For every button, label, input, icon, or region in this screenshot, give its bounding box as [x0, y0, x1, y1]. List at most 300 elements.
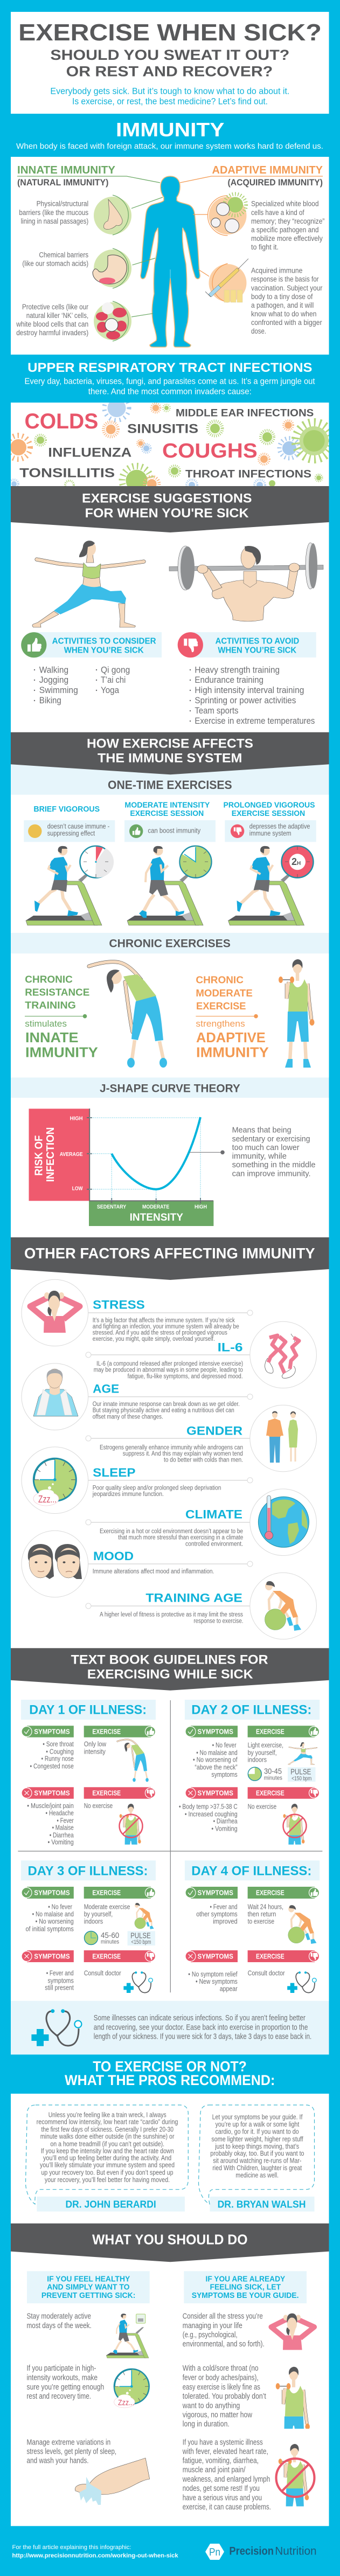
day 1 bad symptoms: • Vomiting — [47, 1838, 74, 1846]
list: activities to consider: Biking — [39, 695, 61, 705]
factor: training age: response to exercise. — [193, 1618, 243, 1625]
footer: Precision Nutrition logo: Nutrition — [275, 2545, 317, 2558]
text: chronic moderate exercise: MODERATE — [196, 988, 253, 999]
day 3 of illness: DAY 3 OF ILLNESS: — [28, 1864, 148, 1878]
text: vaccination: vaccination. Subject your — [251, 284, 323, 292]
factor: age: Our innate immune response can break down as we get older. — [93, 1401, 240, 1408]
list: activities to avoid: Exercise in extreme temperatures — [195, 716, 315, 726]
tip: rest and recovery: If you participate in high- — [27, 2364, 96, 2373]
factor: stress: STRESS — [93, 1298, 145, 1311]
tip: systemic illness: weakness, and enlarged lymph — [182, 2475, 270, 2484]
text: chronic moderate exercise: EXERCISE — [196, 1001, 246, 1012]
column: prolonged vigorous: depresses the adaptive — [249, 823, 310, 830]
section banner: EXERCISE SUGGESTIONS — [82, 491, 252, 506]
day 1 bad exercise — [84, 1787, 155, 1845]
factor: climate: Exercising in a hot or cold environment doesn’t appear to be — [100, 1528, 243, 1535]
day 3 bad exercise: EXERCISE — [92, 1952, 121, 1960]
day 1 good symptoms: • Runny nose — [41, 1755, 74, 1763]
box: if you are already sick: SYMPTOMS BE YOUR GUIDE. — [192, 2291, 299, 2300]
factor: sleep — [22, 1447, 253, 1513]
day 1 good symptoms: • Congested nose — [30, 1762, 74, 1770]
connector lines — [131, 197, 209, 317]
panel: title — [11, 12, 329, 114]
day 3 good exercise: indoors — [84, 1917, 103, 1926]
adaptive heading: ADAPTIVE IMMUNITY — [212, 164, 323, 176]
day 2 bad exercise — [248, 1787, 319, 1845]
day 2 good exercise: minutes — [264, 1775, 282, 1781]
text: chemical barriers: (like our stomach acids) — [22, 259, 88, 267]
text: vaccination: confronted with a bigger — [251, 318, 322, 327]
day 3 bad exercise — [84, 1950, 155, 1993]
day 1 good exercise: Only low — [84, 1740, 107, 1748]
text: vaccination — [251, 267, 323, 335]
callout: activities to avoid — [178, 632, 316, 657]
day 2 bad exercise: EXERCISE — [256, 1789, 285, 1797]
column: moderate intensity: EXERCISE SESSION — [130, 809, 204, 818]
day 1 good symptoms: • Coughing — [46, 1747, 74, 1755]
tip: cold or sore throat: With a cold/sore throat (no — [183, 2364, 259, 2373]
day 1 bad symptoms: • Headache — [45, 1809, 74, 1817]
day 4 bad symptoms: • New symptoms — [196, 1977, 238, 1985]
day 2 good symptoms: SYMPTOMS — [197, 1728, 233, 1735]
x axis labels: HIGH — [195, 1204, 207, 1210]
icon: blood cells — [94, 301, 131, 341]
innate heading — [17, 164, 160, 188]
footer: Precision Nutrition logo: Pn — [209, 2547, 220, 2558]
day 3 bad symptoms: still present — [45, 1984, 74, 1992]
day 4 bad symptoms: • No symptom relief — [188, 1970, 238, 1978]
list: activities to avoid: Team sports — [195, 705, 238, 716]
quote: John Berardi: you’ll end up feeling better during the activity. And — [43, 2154, 171, 2162]
factor: training age — [86, 1573, 316, 1639]
section banner: WHAT YOU SHOULD DO — [92, 2231, 248, 2247]
factor: training age: A higher level of fitness is protective as it may limit the stress — [100, 1611, 243, 1618]
virus decoration — [11, 403, 329, 486]
section banner: THE IMMUNE SYSTEM — [98, 751, 242, 765]
day 2 good symptoms: “above the neck” — [195, 1763, 238, 1771]
day 2 good exercise: EXERCISE — [256, 1728, 285, 1735]
factor: IL-6 — [86, 1321, 316, 1388]
list: activities to consider: T’ai chi — [101, 675, 126, 685]
y axis labels — [33, 1116, 83, 1192]
x axis labels: MODERATE — [142, 1204, 170, 1210]
x axis labels: INTENSITY — [130, 1212, 183, 1223]
day 2 good symptoms: • No worsening of — [193, 1756, 238, 1764]
illustration: washing hands — [75, 2458, 150, 2505]
callout: curve explanation: can improve immunity. — [232, 1169, 311, 1178]
day 4 good symptoms: other symptoms — [196, 1910, 238, 1918]
text: chronic moderate exercise: IMMUNITY — [196, 1044, 269, 1061]
text: physical barriers: lining in nasal passages) — [21, 217, 88, 225]
quote: Bryan Walsh: ried With Children, laughter is great — [212, 2164, 302, 2172]
day 3 good symptoms: • No malaise and — [32, 1910, 74, 1918]
day 3 good exercise: by yourself, — [84, 1910, 113, 1918]
tip: cold or sore throat: long in duration. — [183, 2419, 230, 2428]
callout: activities to avoid: ACTIVITIES TO AVOID — [216, 637, 299, 646]
tip: rest and recovery: rest and recovery time. — [27, 2392, 91, 2401]
quote: John Berardi: your recovery, you’ll feel better for having moved. — [45, 2176, 170, 2184]
day 1 good symptoms: SYMPTOMS — [34, 1728, 70, 1735]
column: prolonged vigorous: PROLONGED VIGOROUS — [223, 801, 315, 809]
callout: activities to consider: ACTIVITIES TO CONSIDER — [52, 637, 156, 646]
heading: to exercise or not — [65, 2058, 275, 2088]
tip: systemic illness: fatigue, vomiting, diarrhea, — [183, 2456, 259, 2465]
text: specialized white blood cells — [251, 200, 324, 251]
quote: John Berardi: you’ll likely stimulate your immune system and speed — [40, 2161, 175, 2169]
footer: article link — [12, 2544, 179, 2559]
day 4 good exercise: to exercise — [248, 1917, 274, 1926]
day 1 good exercise: intensity — [84, 1747, 106, 1755]
day 4 bad exercise: EXERCISE — [256, 1952, 285, 1960]
tip: systemic illness: muscle and joint pain/ — [183, 2466, 246, 2475]
column: prolonged vigorous: immune system — [249, 830, 291, 837]
column: prolonged vigorous: EXERCISE SESSION — [232, 809, 305, 818]
main title: SHOULD YOU SWEAT IT OUT? — [50, 47, 289, 63]
text: chronic resistance training: INNATE — [25, 1029, 79, 1045]
box: if you are already sick: FEELING SICK, LET — [210, 2283, 281, 2292]
tip: systemic illness: with fever, elevated heart rate, — [182, 2447, 268, 2456]
day 1 bad symptoms: SYMPTOMS — [34, 1789, 70, 1797]
day 2 bad symptoms — [179, 1787, 238, 1832]
factor: stress — [22, 1279, 253, 1346]
day 2 good symptoms — [185, 1726, 238, 1778]
day 3 good exercise: <150 bpm — [131, 1939, 151, 1945]
illustration: man lifting barbell — [169, 543, 323, 621]
tip: manage stress: stress levels, get plenty of sleep, — [27, 2447, 116, 2456]
list: activities to avoid: Sprinting or power activities — [195, 695, 296, 705]
infection names: SINUSITIS — [127, 421, 198, 436]
day 3 good symptoms: • No worsening — [36, 1917, 74, 1926]
quote: Bryan Walsh: sit around watching re-runs of Mar- — [213, 2156, 301, 2164]
footer: Precision Nutrition logo — [205, 2544, 317, 2560]
icon: nose — [94, 195, 131, 235]
factor: climate — [86, 1489, 316, 1555]
day 2 good exercise: <150 bpm — [292, 1775, 311, 1782]
day 2 bad symptoms: • Diarrhea — [213, 1817, 238, 1825]
main title: EXERCISE WHEN SICK? — [18, 19, 322, 46]
box: if you feel healthy — [27, 2271, 150, 2303]
day 1 bad symptoms: • Malaise — [52, 1824, 74, 1832]
tip: consider stress: Consider all the stress you’re — [183, 2312, 263, 2321]
text: vaccination: Acquired immune — [251, 267, 302, 275]
section banner — [11, 1237, 329, 1280]
factor: stress: exercise, you might, quite simply, overload yourself. — [93, 1336, 215, 1342]
day 2 bad symptoms: SYMPTOMS — [197, 1789, 233, 1797]
main title: OR REST AND RECOVER? — [66, 63, 273, 79]
list: activities to avoid: High intensity interval training — [195, 685, 304, 695]
column: brief vigorous — [24, 805, 115, 925]
day 2 good exercise: indoors — [248, 1756, 267, 1764]
icon: syringe and vials — [205, 259, 248, 302]
quote: Bryan Walsh: some lighter weight, higher rep stuff — [211, 2135, 303, 2143]
factor: gender — [86, 1405, 316, 1472]
day 2 good symptoms: • No malaise and — [196, 1748, 238, 1756]
day 3 good symptoms: SYMPTOMS — [34, 1889, 70, 1896]
day 1 good exercise — [84, 1726, 155, 1782]
column: moderate intensity: can boost immunity — [148, 827, 201, 835]
tip: stay moderately active — [27, 2312, 149, 2358]
tip: cold or sore throat: tolerated. You probably don’t — [183, 2392, 266, 2401]
callout: activities to consider — [21, 632, 162, 657]
day 4 bad exercise — [248, 1950, 319, 1993]
factor: IL-6: IL-6 (a compound released after prolonged intensive exercise) — [96, 1361, 243, 1367]
text: specialized white blood cells: to fight it. — [251, 243, 279, 251]
column: prolonged vigorous: 2H — [292, 856, 301, 867]
factor: age: AGE — [93, 1382, 119, 1395]
y axis labels: INFECTION — [45, 1127, 57, 1182]
day 4 good exercise: then return — [248, 1910, 276, 1918]
day 1 bad symptoms — [22, 1787, 74, 1846]
body figure — [141, 176, 200, 347]
callout: curve explanation: Means that being — [232, 1126, 292, 1135]
infection names: INFLUENZA — [48, 446, 131, 460]
text: chronic resistance training: stimulates — [25, 1019, 67, 1029]
day 2 good exercise: PULSE — [290, 1768, 311, 1777]
tip: systemic illness: nodes, get some rest! If you — [183, 2484, 260, 2493]
day 3 of illness — [21, 1860, 156, 1993]
factor: mood: Immune alterations affect mood and inflammation. — [93, 1568, 214, 1575]
box: if you feel healthy: PREVENT GETTING SICK: — [41, 2291, 136, 2300]
quote: Bryan Walsh: you’re up for a walk or some light — [216, 2120, 300, 2128]
day 2 bad exercise: No exercise — [248, 1803, 276, 1811]
day 2 bad symptoms: • Increased coughing — [185, 1810, 238, 1818]
day 4 good exercise — [248, 1887, 319, 1944]
factor: stress: It’s a big factor that affects the immune system. If you’re sick — [93, 1317, 235, 1324]
day 3 bad symptoms: symptoms — [47, 1976, 74, 1984]
j-shape band — [11, 1078, 329, 1098]
quote: John Berardi: minute walks done either outside (in the sunshine) or — [40, 2132, 175, 2141]
tip: cold or sore throat: fever or body aches/pains), — [183, 2373, 259, 2383]
infection names: MIDDLE EAR INFECTIONS — [176, 408, 314, 419]
quote: Bryan Walsh — [198, 2105, 315, 2212]
callout: curve explanation: something in the middle — [232, 1160, 316, 1169]
text: chronic resistance training — [25, 974, 98, 1061]
text: vaccination: dose. — [251, 327, 266, 335]
heading: upper respiratory tract infections: Every day, bacteria, viruses, fungi, and parasites come at us. It’s a germ jungle out — [25, 377, 315, 386]
quote: Bryan Walsh: medicine as well. — [235, 2171, 279, 2179]
tip: rest and recovery: sure you’re getting enough — [27, 2383, 104, 2392]
text: specialized white blood cells: mobilize more effectively — [251, 234, 323, 243]
section banner — [11, 732, 329, 774]
factor: stress: and fighting an infection, your immune system will already be — [93, 1324, 239, 1330]
footer: article link: For the full article explaining this infographic: — [12, 2544, 131, 2551]
text: chronic moderate exercise: CHRONIC — [196, 975, 244, 986]
one-time exercises band — [11, 764, 329, 795]
text: chronic resistance training: RESISTANCE — [25, 987, 89, 998]
text: physical barriers: barriers (like the mucous — [19, 209, 88, 217]
heading: upper respiratory tract infections: there. And the most common invaders cause: — [88, 387, 252, 397]
quote: Bryan Walsh: just to keep things moving, that’s — [214, 2142, 300, 2150]
factor: gender: Estrogens generally enhance immunity while androgens can — [100, 1444, 243, 1451]
quote: John Berardi: up your recovery too. But even if you don’t speed up — [41, 2168, 174, 2176]
chart: j-shape curve — [29, 1109, 213, 1226]
tip: rest and recovery: Zzz... — [118, 2398, 135, 2407]
callout: curve explanation: too much can lower — [232, 1143, 300, 1152]
quote: Bryan Walsh: Let your symptoms be your guide. If — [212, 2113, 303, 2121]
factor: sleep: Zzz... — [38, 1494, 57, 1505]
section banner: OTHER FACTORS AFFECTING IMMUNITY — [24, 1245, 315, 1262]
day 1 good symptoms — [22, 1726, 74, 1770]
list: activities to consider: Walking — [39, 664, 68, 675]
illustration: side bend — [89, 962, 167, 1068]
tip: manage stress: Manage extreme variations in — [27, 2437, 110, 2447]
column: prolonged vigorous — [223, 801, 316, 925]
text: specialized white blood cells: memory; they “recognize” — [251, 217, 324, 225]
quote: John Berardi: If you keep the intensity low and the heart rate down — [41, 2146, 174, 2155]
j-shape band: J-SHAPE CURVE THEORY — [100, 1083, 240, 1095]
factor: IL-6: fatigue, flu-like symptoms, and depressed mood. — [128, 1373, 243, 1380]
tip: manage stress — [27, 2437, 150, 2505]
factor: age: But staying physically active and eating a nutritious diet can — [93, 1408, 234, 1414]
x axis labels — [97, 1204, 207, 1223]
innate heading: (NATURAL IMMUNITY) — [17, 177, 109, 188]
factor: climate: CLIMATE — [185, 1508, 242, 1521]
factor: training age: TRAINING AGE — [145, 1591, 242, 1605]
day 1 of illness — [21, 1700, 156, 1846]
innate heading: INNATE IMMUNITY — [17, 164, 116, 176]
tip: systemic illness: If you have a systemic illness — [183, 2437, 263, 2447]
day 2 good symptoms: • No fever — [212, 1741, 237, 1749]
day 3 bad symptoms: • Fever and — [46, 1969, 74, 1977]
quote: John Berardi — [26, 2105, 188, 2212]
tip: systemic illness: have a serious virus and you — [183, 2493, 262, 2502]
column: moderate intensity: MODERATE INTENSITY — [124, 801, 210, 809]
callout: curve explanation — [190, 1126, 316, 1178]
text: chronic resistance training: CHRONIC — [25, 974, 73, 985]
illustration: woman with dumbbells — [279, 959, 315, 1068]
column: brief vigorous: BRIEF VIGOROUS — [33, 805, 100, 814]
quote: John Berardi: recommend low intensity, low heart rate “cardio” during — [37, 2118, 178, 2126]
day 1 bad symptoms: • Muscle/joint pain — [27, 1802, 74, 1810]
panel: what you should do — [11, 2224, 329, 2536]
intro text: Is exercise, or rest, the best medicine? Let’s find out. — [72, 97, 268, 107]
tip: manage stress: and wash your hands. — [27, 2456, 88, 2465]
day 2 good symptoms: symptoms — [211, 1770, 238, 1778]
tip: cold or sore throat — [182, 2365, 310, 2429]
factor: gender: to do better with colds than men. — [164, 1457, 243, 1464]
infection names — [19, 408, 314, 481]
y axis labels: LOW — [72, 1186, 83, 1192]
callout: activities to avoid: WHEN YOU’RE SICK — [218, 646, 297, 655]
factor: IL-6: may be produced in abnormal ways in some people, leading to — [94, 1367, 243, 1374]
factor: stress: stressed. And if you add the stress of prolonged vigorous — [93, 1330, 227, 1337]
factor: gender: GENDER — [186, 1424, 242, 1437]
heading: immunity — [16, 119, 323, 151]
day 2 bad symptoms: • Vomiting — [211, 1824, 238, 1832]
factor: age: offset many of these changes. — [93, 1414, 163, 1420]
day 1 good symptoms: • Sore throat — [43, 1740, 74, 1748]
quote: John Berardi: DR. JOHN BERARDI — [66, 2199, 156, 2210]
day 3 bad symptoms — [22, 1950, 74, 1992]
box: if you are already sick: IF YOU ARE ALREADY — [206, 2274, 285, 2283]
day 2 good exercise: 30-45 — [264, 1768, 282, 1776]
intro text: Everybody gets sick. But it’s tough to know what to do about it. — [50, 87, 289, 96]
one-time exercises band: ONE-TIME EXERCISES — [108, 778, 232, 792]
day 3 bad exercise: Consult doctor — [84, 1969, 121, 1977]
text: chemical barriers — [22, 251, 88, 267]
list: activities to consider: Jogging — [39, 675, 68, 685]
factor: mood: MOOD — [93, 1549, 134, 1563]
text: specialized white blood cells: Specialized white blood — [251, 200, 319, 208]
tip: cold or sore throat: vigorous, no matter how — [183, 2410, 252, 2419]
main title — [18, 19, 322, 79]
tip: consider stress: managing in your life — [183, 2321, 242, 2330]
x axis labels: SEDENTARY — [97, 1204, 126, 1210]
tip: stay moderately active: Stay moderately active — [27, 2312, 91, 2321]
column: brief vigorous: suppressing effect — [47, 830, 95, 837]
quote: Bryan Walsh: DR. BRYAN WALSH — [218, 2199, 306, 2210]
day 3 good exercise — [84, 1887, 155, 1945]
text: specialized white blood cells: cells have a kind of — [251, 209, 304, 217]
factor: IL-6: IL-6 — [218, 1340, 243, 1354]
quote: John Berardi: Unless you’re feeling like a train wreck, I always — [48, 2110, 166, 2118]
icon: white blood cells — [208, 194, 247, 236]
factor: mood — [22, 1531, 253, 1597]
day 4 bad symptoms: appear — [220, 1985, 238, 1993]
infection names: COLDS — [25, 410, 98, 433]
heading: immunity: IMMUNITY — [116, 119, 224, 141]
panel: infections word cloud — [11, 403, 329, 486]
adaptive heading: (ACQUIRED IMMUNITY) — [227, 177, 323, 188]
text: chronic resistance training: TRAINING — [25, 1000, 76, 1011]
tip: systemic illness: exercise, it can cause problems. — [183, 2503, 271, 2512]
day 2 good exercise — [248, 1726, 319, 1782]
callout: curve explanation: immunity, while — [232, 1152, 287, 1161]
day 3 good exercise: PULSE — [130, 1932, 151, 1941]
section banner: EXERCISING WHILE SICK — [87, 1667, 253, 1681]
y axis labels: AVERAGE — [60, 1152, 83, 1158]
day 3 good exercise: EXERCISE — [92, 1889, 121, 1896]
quote: John Berardi: the first few days of sickness. Generally I prefer 20-30 — [41, 2125, 174, 2133]
tip: consider stress — [183, 2312, 314, 2350]
tip: rest and recovery — [27, 2364, 149, 2408]
text: physical barriers — [19, 200, 88, 225]
day 4 of illness — [185, 1860, 320, 1993]
infection names: COUGHS — [162, 440, 258, 462]
infection names: TONSILLITIS — [19, 466, 115, 481]
day 4 bad exercise: Consult doctor — [248, 1969, 285, 1977]
y axis labels: HIGH — [70, 1116, 83, 1121]
list: activities to consider: Qi gong — [101, 664, 130, 675]
day 4 good symptoms: improved — [213, 1917, 238, 1926]
text: vaccination: body to a tiny dose of — [251, 293, 313, 301]
footer: Precision Nutrition logo: Precision — [229, 2545, 274, 2558]
box: if you feel healthy: AND SIMPLY WANT TO — [47, 2283, 130, 2292]
day 1 bad exercise: No exercise — [84, 1802, 113, 1810]
chronic exercises band — [11, 933, 329, 953]
day 1 bad symptoms: • Diarrhea — [50, 1831, 74, 1839]
chronic exercises band: CHRONIC EXERCISES — [109, 938, 231, 950]
text: vaccination: know what to do when — [251, 310, 317, 318]
tip: cold or sore throat: want to do anything — [182, 2401, 240, 2410]
adaptive heading — [180, 164, 323, 188]
day 1 good exercise: EXERCISE — [92, 1728, 121, 1735]
quote: Bryan Walsh: probably okay, too. But if you want to — [210, 2149, 304, 2157]
tip: stay moderately active: most days of the week. — [27, 2321, 92, 2330]
panel: exercise suggestions — [11, 486, 329, 732]
day 2 of illness — [179, 1700, 320, 1845]
list: activities to consider — [34, 664, 130, 705]
footer: article link: http://www.precisionnutrition.com/working-out-when-sick — [12, 2552, 179, 2559]
text: specialized white blood cells: a specific pathogen and — [251, 226, 319, 234]
factor: sleep: SLEEP — [93, 1466, 136, 1479]
heading: upper respiratory tract infections — [25, 361, 315, 397]
box: if you are already sick — [184, 2271, 307, 2303]
icon: stomach — [93, 248, 131, 288]
box: if you feel healthy: IF YOU FEEL HEALTHY — [47, 2274, 130, 2283]
text: chronic moderate exercise — [196, 975, 269, 1061]
list: activities to avoid: Endurance training — [195, 675, 263, 685]
